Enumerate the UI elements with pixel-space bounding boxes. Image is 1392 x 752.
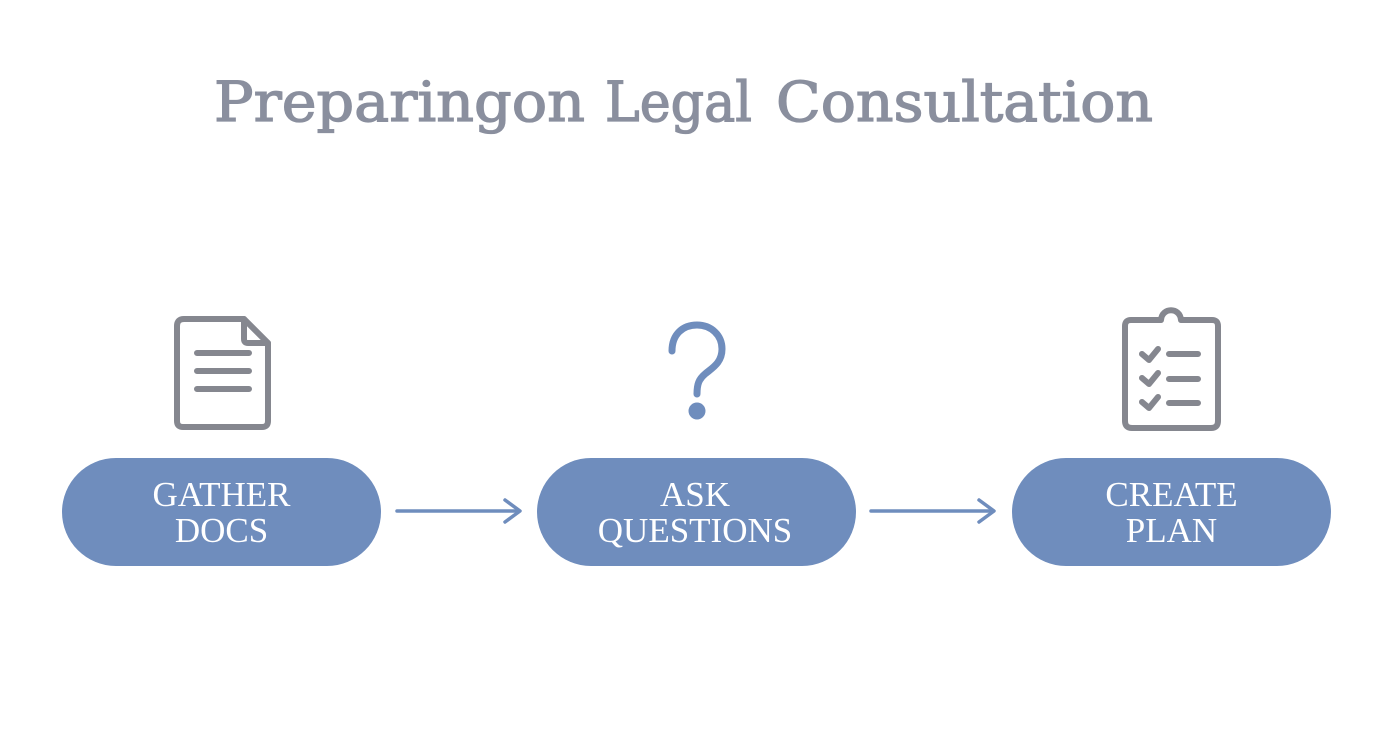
step: ask questions: QUESTIONS (598, 511, 792, 550)
step: ask questions: ASK (660, 475, 730, 514)
step: create plan (1012, 458, 1331, 566)
title: Consultation (776, 70, 1153, 134)
step: gather docs: GATHER (152, 475, 291, 514)
icon: document (177, 319, 268, 427)
title: Legal (605, 70, 752, 134)
arrow: gather docs to ask questions (397, 500, 520, 522)
step: create plan: CREATE (1105, 475, 1238, 514)
arrow: ask questions to create plan (871, 500, 994, 522)
title: Preparingon (214, 70, 585, 134)
title (214, 70, 1153, 134)
step: create plan: PLAN (1126, 511, 1217, 550)
step: gather docs: DOCS (175, 511, 268, 550)
step: ask questions (537, 458, 856, 566)
icon: clipboard checklist (1125, 310, 1218, 428)
step: gather docs (62, 458, 381, 566)
icon: question mark (672, 325, 722, 420)
